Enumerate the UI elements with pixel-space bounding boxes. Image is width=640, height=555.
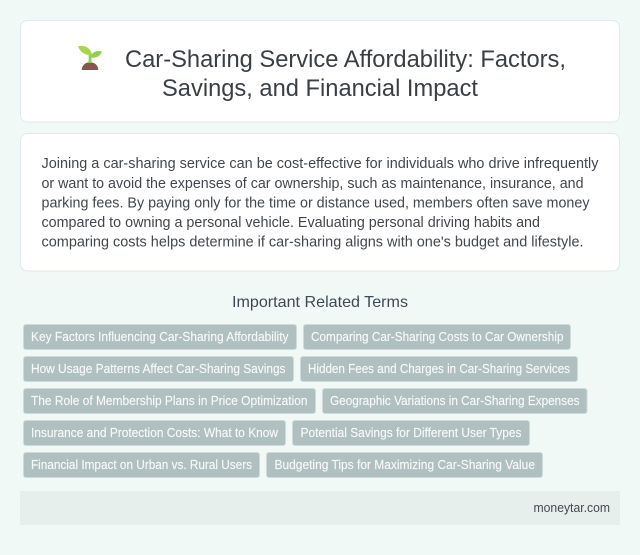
tag: comparing costs: Comparing Car-Sharing Costs to Car Ownership — [311, 330, 564, 344]
tag: comparing costs — [304, 324, 570, 350]
heading: related terms: Important Related Terms — [232, 294, 408, 311]
tag: potential savings: Potential Savings for Different User Types — [300, 426, 522, 440]
text block: summary paragraph: Joining a car-sharing service can be cost-effective for individuals who drive infrequently — [42, 156, 599, 172]
tag: budgeting tips: Budgeting Tips for Maximizing Car-Sharing Value — [274, 458, 535, 472]
tag: membership plans: The Role of Membership Plans in Price Optimization — [31, 394, 308, 408]
panel: header — [20, 20, 620, 122]
tag: key factors: Key Factors Influencing Car-Sharing Affordability — [31, 330, 289, 344]
tag: hidden fees — [300, 356, 578, 382]
text block: summary paragraph: comparing costs helps determine if car-sharing aligns with one's budget and lifestyle. — [42, 234, 584, 250]
tag: urban vs rural — [24, 452, 260, 478]
tag: insurance — [24, 420, 286, 446]
tag: key factors — [24, 324, 296, 350]
panel: summary text — [20, 134, 620, 271]
footer: moneytar.com — [534, 501, 610, 515]
tag: hidden fees: Hidden Fees and Charges in Car-Sharing Services — [308, 362, 570, 376]
tag: urban vs rural: Financial Impact on Urban vs. Rural Users — [31, 458, 252, 472]
tag: potential savings — [292, 420, 530, 446]
icon: seedling — [78, 46, 102, 70]
tag: geographic variations — [322, 388, 587, 414]
tag: membership plans — [24, 388, 316, 414]
tag: budgeting tips — [266, 452, 542, 478]
text block: summary paragraph: compared to owning a personal vehicle. Evaluating personal driving habits and — [42, 215, 540, 231]
title: Savings, and Financial Impact — [162, 75, 478, 102]
text block: summary paragraph: or want to avoid the expenses of car ownership, such as maintenance, insurance, and — [42, 176, 584, 192]
tag: usage patterns — [24, 356, 294, 382]
tag: geographic variations: Geographic Variations in Car-Sharing Expenses — [330, 394, 580, 408]
tag: insurance: Insurance and Protection Costs: What to Know — [31, 426, 279, 440]
text block: summary paragraph — [42, 156, 599, 250]
tag list — [24, 324, 587, 478]
footer — [20, 491, 620, 525]
text block: summary paragraph: parking fees. By paying only for the time or distance used, members often save money — [42, 196, 590, 212]
title — [125, 46, 566, 102]
tag: usage patterns: How Usage Patterns Affect Car-Sharing Savings — [31, 362, 286, 376]
title: Car-Sharing Service Affordability: Factors, — [125, 46, 566, 73]
